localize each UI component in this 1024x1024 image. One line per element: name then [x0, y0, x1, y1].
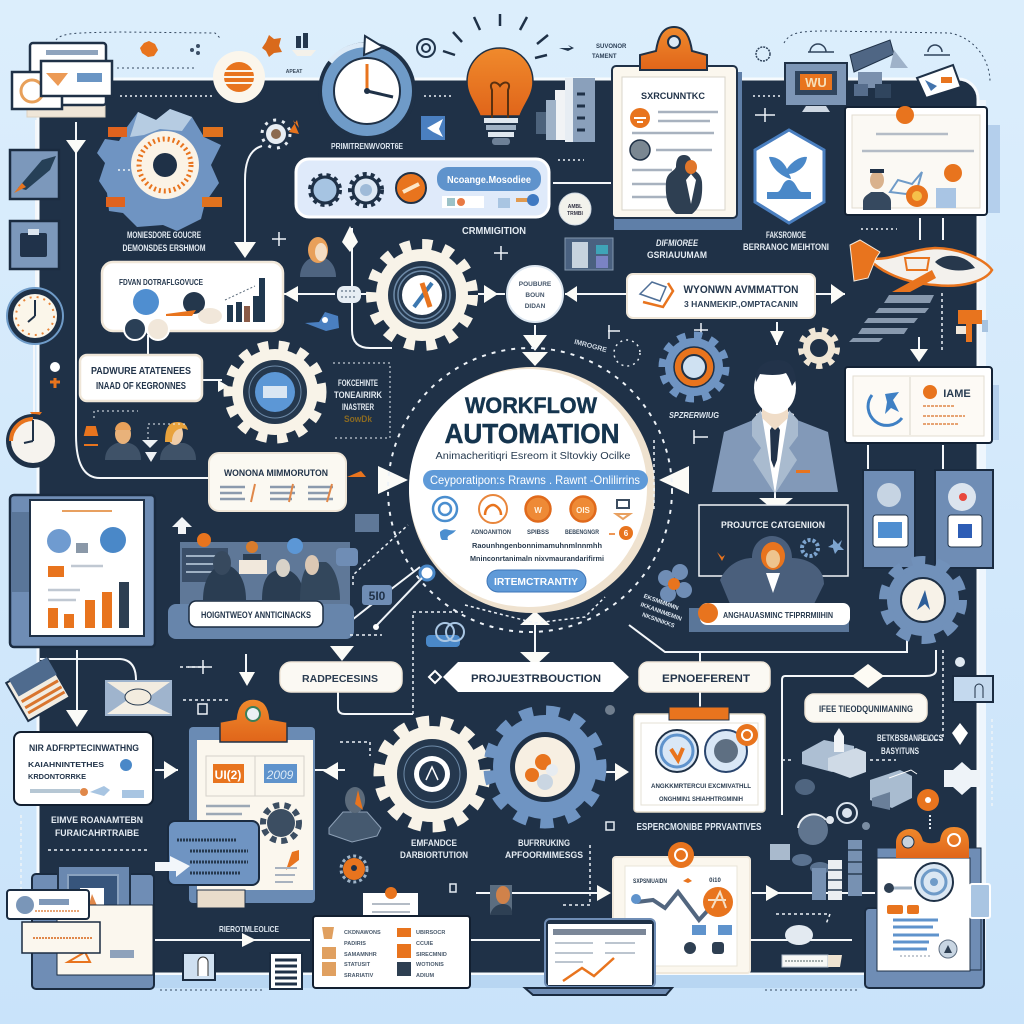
slanted text note: [636, 594, 685, 631]
pill: feedback: [805, 694, 927, 722]
orange dial: [396, 173, 426, 203]
panel: automation card: 3 HANMEKIP.,OMPTACANIN: [684, 299, 798, 309]
clip: [640, 27, 707, 70]
team pill: [189, 601, 323, 627]
caption with dotted frame: TONEAIRIRK: [334, 390, 382, 400]
node: [373, 566, 434, 630]
label: GSRIAUUMAM: [647, 250, 707, 261]
panel: table card: CCUIE: [416, 941, 433, 947]
gear white left: [229, 346, 321, 438]
icon: orange stripes circle: [213, 51, 265, 103]
label: FAKSROMOE: [766, 230, 806, 241]
pill: rad: [280, 662, 402, 692]
caption with dotted frame: SowDk: [344, 414, 373, 424]
circle node: DIDAN: [525, 303, 546, 310]
gear white lower: [380, 722, 484, 826]
panel: evaluation card: [634, 707, 765, 812]
circle node: POUBURE: [519, 281, 552, 288]
central circle: W: [534, 506, 542, 515]
panel: line chart card: 0i10: [709, 878, 721, 884]
caption: BETKBSBANREIOCS: [877, 733, 943, 743]
panel: table card: SAMAMNHR: [344, 952, 377, 958]
caption: [877, 733, 943, 756]
node diamond: [429, 664, 980, 795]
central circle: OIS: [576, 506, 591, 515]
panel: blue note: [155, 821, 259, 885]
icon: star flag: [421, 116, 445, 140]
circle node: BOUN: [525, 292, 545, 299]
label: CRMMIGITION: [462, 226, 526, 237]
label: BERRANOC MEIHTONI: [743, 242, 829, 253]
caption: SPZRERWIUG: [669, 410, 719, 420]
small crosses: [30, 362, 60, 420]
caption with dotted frame: FOKCEHINTE: [338, 378, 378, 388]
caption: FURAICAHRTRAIBE: [55, 828, 139, 839]
gear white centre: [372, 245, 472, 345]
person portrait: [490, 885, 512, 915]
book icon: [5, 657, 70, 721]
slanted text note: IKKANNMEMIN: [639, 602, 682, 623]
body text: Raounhngenbonnimamuhnmlnnmhh: [472, 543, 602, 550]
small device tags: [172, 514, 392, 605]
connector lines: [34, 120, 943, 940]
marks: [118, 96, 897, 444]
caption: DEMONSDES ERSHMOM: [122, 243, 206, 254]
panel: workflow migration card: [209, 453, 366, 511]
machine icon: [565, 238, 613, 270]
blue pill: [437, 167, 541, 191]
label: Primitive: PRIMITRENWVORT6E: [331, 142, 404, 151]
side device icon: [953, 657, 993, 702]
person manager: [712, 360, 838, 494]
gear cream: [801, 330, 837, 366]
small hub: [262, 120, 299, 148]
link icon: [426, 623, 464, 647]
servers: [795, 728, 917, 810]
icon: light bulb: [443, 14, 548, 145]
panel: table card: UBIRSOCR: [416, 930, 445, 936]
button: [487, 570, 586, 592]
panel: top right presentation: [845, 106, 1000, 215]
small badge: TRMBI: [567, 211, 584, 217]
small link icons: [450, 705, 615, 892]
panel: clipboard profile: [612, 27, 742, 230]
panel: IAME card: IAME: [943, 388, 971, 400]
label: RIEROTMLEOLICE: [219, 924, 279, 934]
mini labels: ADNOANITION: [471, 529, 511, 536]
orange badge: 6: [624, 529, 629, 538]
arrowheads: [66, 140, 928, 947]
icons row: [433, 495, 630, 540]
gear small 2: [350, 174, 382, 206]
title: [444, 393, 620, 449]
panel: table card: SRARIATIV: [344, 973, 374, 979]
panels: two device boxes: [863, 470, 993, 568]
panel: intro card: KRDONTORRKE: [28, 772, 86, 781]
plane: [849, 240, 992, 342]
small people: [84, 411, 196, 462]
panel: table card: STATUSIT: [344, 962, 371, 968]
small badge: [559, 193, 591, 225]
panel: evaluation card: ONGHMIN1 SHIAHHTRGMINIH: [659, 796, 743, 803]
panel: team: [168, 533, 354, 639]
panel: parameters card: INAAD OF KEGRONNES: [96, 380, 186, 392]
panel: line chart card: [613, 842, 750, 973]
panel: IAME card: [845, 367, 999, 443]
panel: project office: PROJUTCE CATGENIION: [721, 520, 825, 530]
label: DIFMIOREE: [656, 238, 699, 249]
icon: scattered blocks: [850, 40, 961, 98]
circle node: [507, 266, 563, 322]
envelope: [105, 680, 172, 716]
panel: bottom left stack: [32, 866, 154, 989]
mini labels: BEBENGNGR: [565, 529, 599, 536]
caption: ESPERCMONIBE PPRVANTIVES: [636, 822, 762, 833]
orange badge: [609, 526, 633, 540]
panel: intro card: NIR ADFRPTECINWATHNG: [29, 743, 139, 753]
blue pill: Ncoange.Mosodiee: [447, 175, 531, 186]
cloud + tag: [782, 925, 842, 967]
person small: [329, 787, 381, 842]
mini labels: SPIBSS: [527, 529, 550, 536]
small squares: [183, 953, 302, 989]
pill: improvement: [639, 662, 770, 692]
hexagon icon: [755, 130, 824, 223]
panel: automation card: WYONWN AVMMATTON: [684, 284, 799, 296]
dotted route: [21, 293, 992, 924]
pill: rad: RADPECESINS: [302, 673, 378, 685]
icon: big clock: [318, 36, 416, 140]
pill: feedback: IFEE TIEODQUNIMANING: [819, 704, 913, 714]
card stack top left: [12, 43, 112, 117]
blue pill: [423, 470, 648, 490]
team pill: HOIGNTWEOY ANNTICINACKS: [201, 610, 311, 621]
icon: monitor WU: [785, 63, 847, 112]
dotted circle: IMROGRE: [573, 339, 608, 354]
top small icons: [140, 33, 950, 75]
caption: EIMVE ROANAMTEBN: [51, 815, 143, 826]
panel: table card: WOTIONIS: [416, 962, 444, 968]
body text: Mninconrtanimaln nixvmaurandarifirmi: [470, 556, 604, 563]
icon: buildings: [536, 78, 595, 142]
person: woman: [300, 237, 336, 277]
row pills: [280, 662, 770, 692]
panel: clipboard dates: 2009: [266, 768, 294, 782]
orange pin: [917, 789, 939, 829]
panel: intro card: [14, 732, 153, 805]
panel: intro card: KAIAHNINTETHES: [28, 760, 104, 769]
subtitle: Animacheritiqri Esreom it Sltovkiy Ocilke: [436, 451, 631, 462]
label: [743, 230, 829, 253]
label: [647, 238, 707, 261]
clock side 1: [7, 288, 63, 344]
dotted circle: [573, 339, 640, 366]
panel: workflow migration card: WONONA MIMMORUTON: [224, 468, 328, 478]
mini labels: [471, 529, 599, 536]
caption: BASYITUNS: [881, 746, 919, 756]
panel: automation card: [627, 274, 815, 318]
stack cards: [7, 890, 100, 953]
heading: SXRCUNNTKC: [641, 91, 706, 101]
panel: project office: [658, 505, 848, 604]
body text: [470, 543, 604, 563]
panel: clipboard dates: [189, 699, 315, 908]
side icons: [10, 150, 59, 269]
caption: [122, 230, 206, 254]
top small icons: TAMENT: [592, 54, 617, 60]
project base + pill: [689, 603, 850, 632]
small device tags: 5I0: [369, 589, 386, 603]
small badge: AMBL: [568, 204, 582, 210]
small connector badge: [337, 286, 361, 303]
clock side 2: [6, 414, 60, 468]
person: [666, 155, 702, 214]
panel: table card: [313, 887, 470, 988]
central dashed ring: [388, 348, 672, 632]
title: WORKFLOW: [465, 393, 597, 418]
title: AUTOMATION: [444, 418, 620, 449]
network marks: [188, 660, 212, 714]
pill: improvement: EPNOEFERENT: [662, 673, 750, 685]
caption: APFOORMIMESGS: [505, 850, 583, 861]
caption: [400, 838, 583, 861]
panel: parameters card: PADWURE ATATENEES: [91, 365, 191, 377]
icon: [341, 856, 367, 882]
panel: evaluation card: ANGKKMRTERCUI EXCMIVATHLL: [651, 783, 751, 790]
panel: clipboard dates: UI(2): [215, 768, 241, 782]
laptop: [525, 919, 672, 995]
gear blue right: [885, 562, 961, 638]
caption with dotted frame: [333, 363, 390, 438]
caption: MONIESDORE GOUCRE: [127, 230, 201, 241]
gear blue lower: [490, 712, 600, 822]
caption with dotted frame: INASTRER: [342, 402, 374, 412]
gear blue orange: [663, 336, 725, 398]
gears clouds: [770, 803, 870, 874]
panel: table card: SIRECMNID: [416, 952, 447, 958]
icon: monitor WU: WU: [805, 75, 827, 90]
caption: EMFANDCE: [411, 838, 457, 849]
panel: table card: ADIUM: [416, 973, 434, 979]
top small icons: APEAT: [286, 69, 302, 75]
central circle: [409, 367, 655, 613]
pill: project: PROJUE3TRBOUCTION: [471, 673, 601, 685]
panel: table card: PADIRIS: [344, 941, 366, 947]
caption: BUFRRUKING: [518, 838, 570, 849]
slanted text note: NKSNNKKS: [641, 612, 675, 630]
panel: chart card: FDVAN DOTRAFLGOVUCE: [119, 277, 203, 287]
button: IRTEMCTRANTIY: [494, 577, 578, 588]
stack bars: [812, 840, 862, 900]
slanted text note: EKSMMMMN: [643, 594, 679, 612]
pill: project: [443, 662, 629, 692]
icon: blue bird: [305, 312, 339, 331]
orange small block: [956, 310, 988, 342]
panel: parameters card: [80, 355, 202, 401]
panel: right clipboard: [865, 827, 990, 988]
panel: chart card: [102, 262, 283, 340]
gear small 1: [310, 175, 340, 205]
caption: DARBIORTUTION: [400, 850, 468, 861]
panel: left document: [10, 495, 155, 647]
panel: line chart card: SXPSNIUAIDN: [633, 878, 667, 885]
clip: [220, 699, 287, 742]
top small icons: SUVONOR: [596, 44, 627, 50]
blue pill: Ceyporatipon:s Rrawns . Rawnt -Onlilirrins: [430, 473, 640, 487]
panel: table card: CKDNAWONS: [344, 930, 381, 936]
caption: [51, 815, 143, 839]
panel: gear strip: [296, 159, 549, 217]
project base + pill: ANGHAUASMINC TFIPRRMIIHIN: [723, 610, 833, 620]
broken gear: [97, 109, 223, 231]
